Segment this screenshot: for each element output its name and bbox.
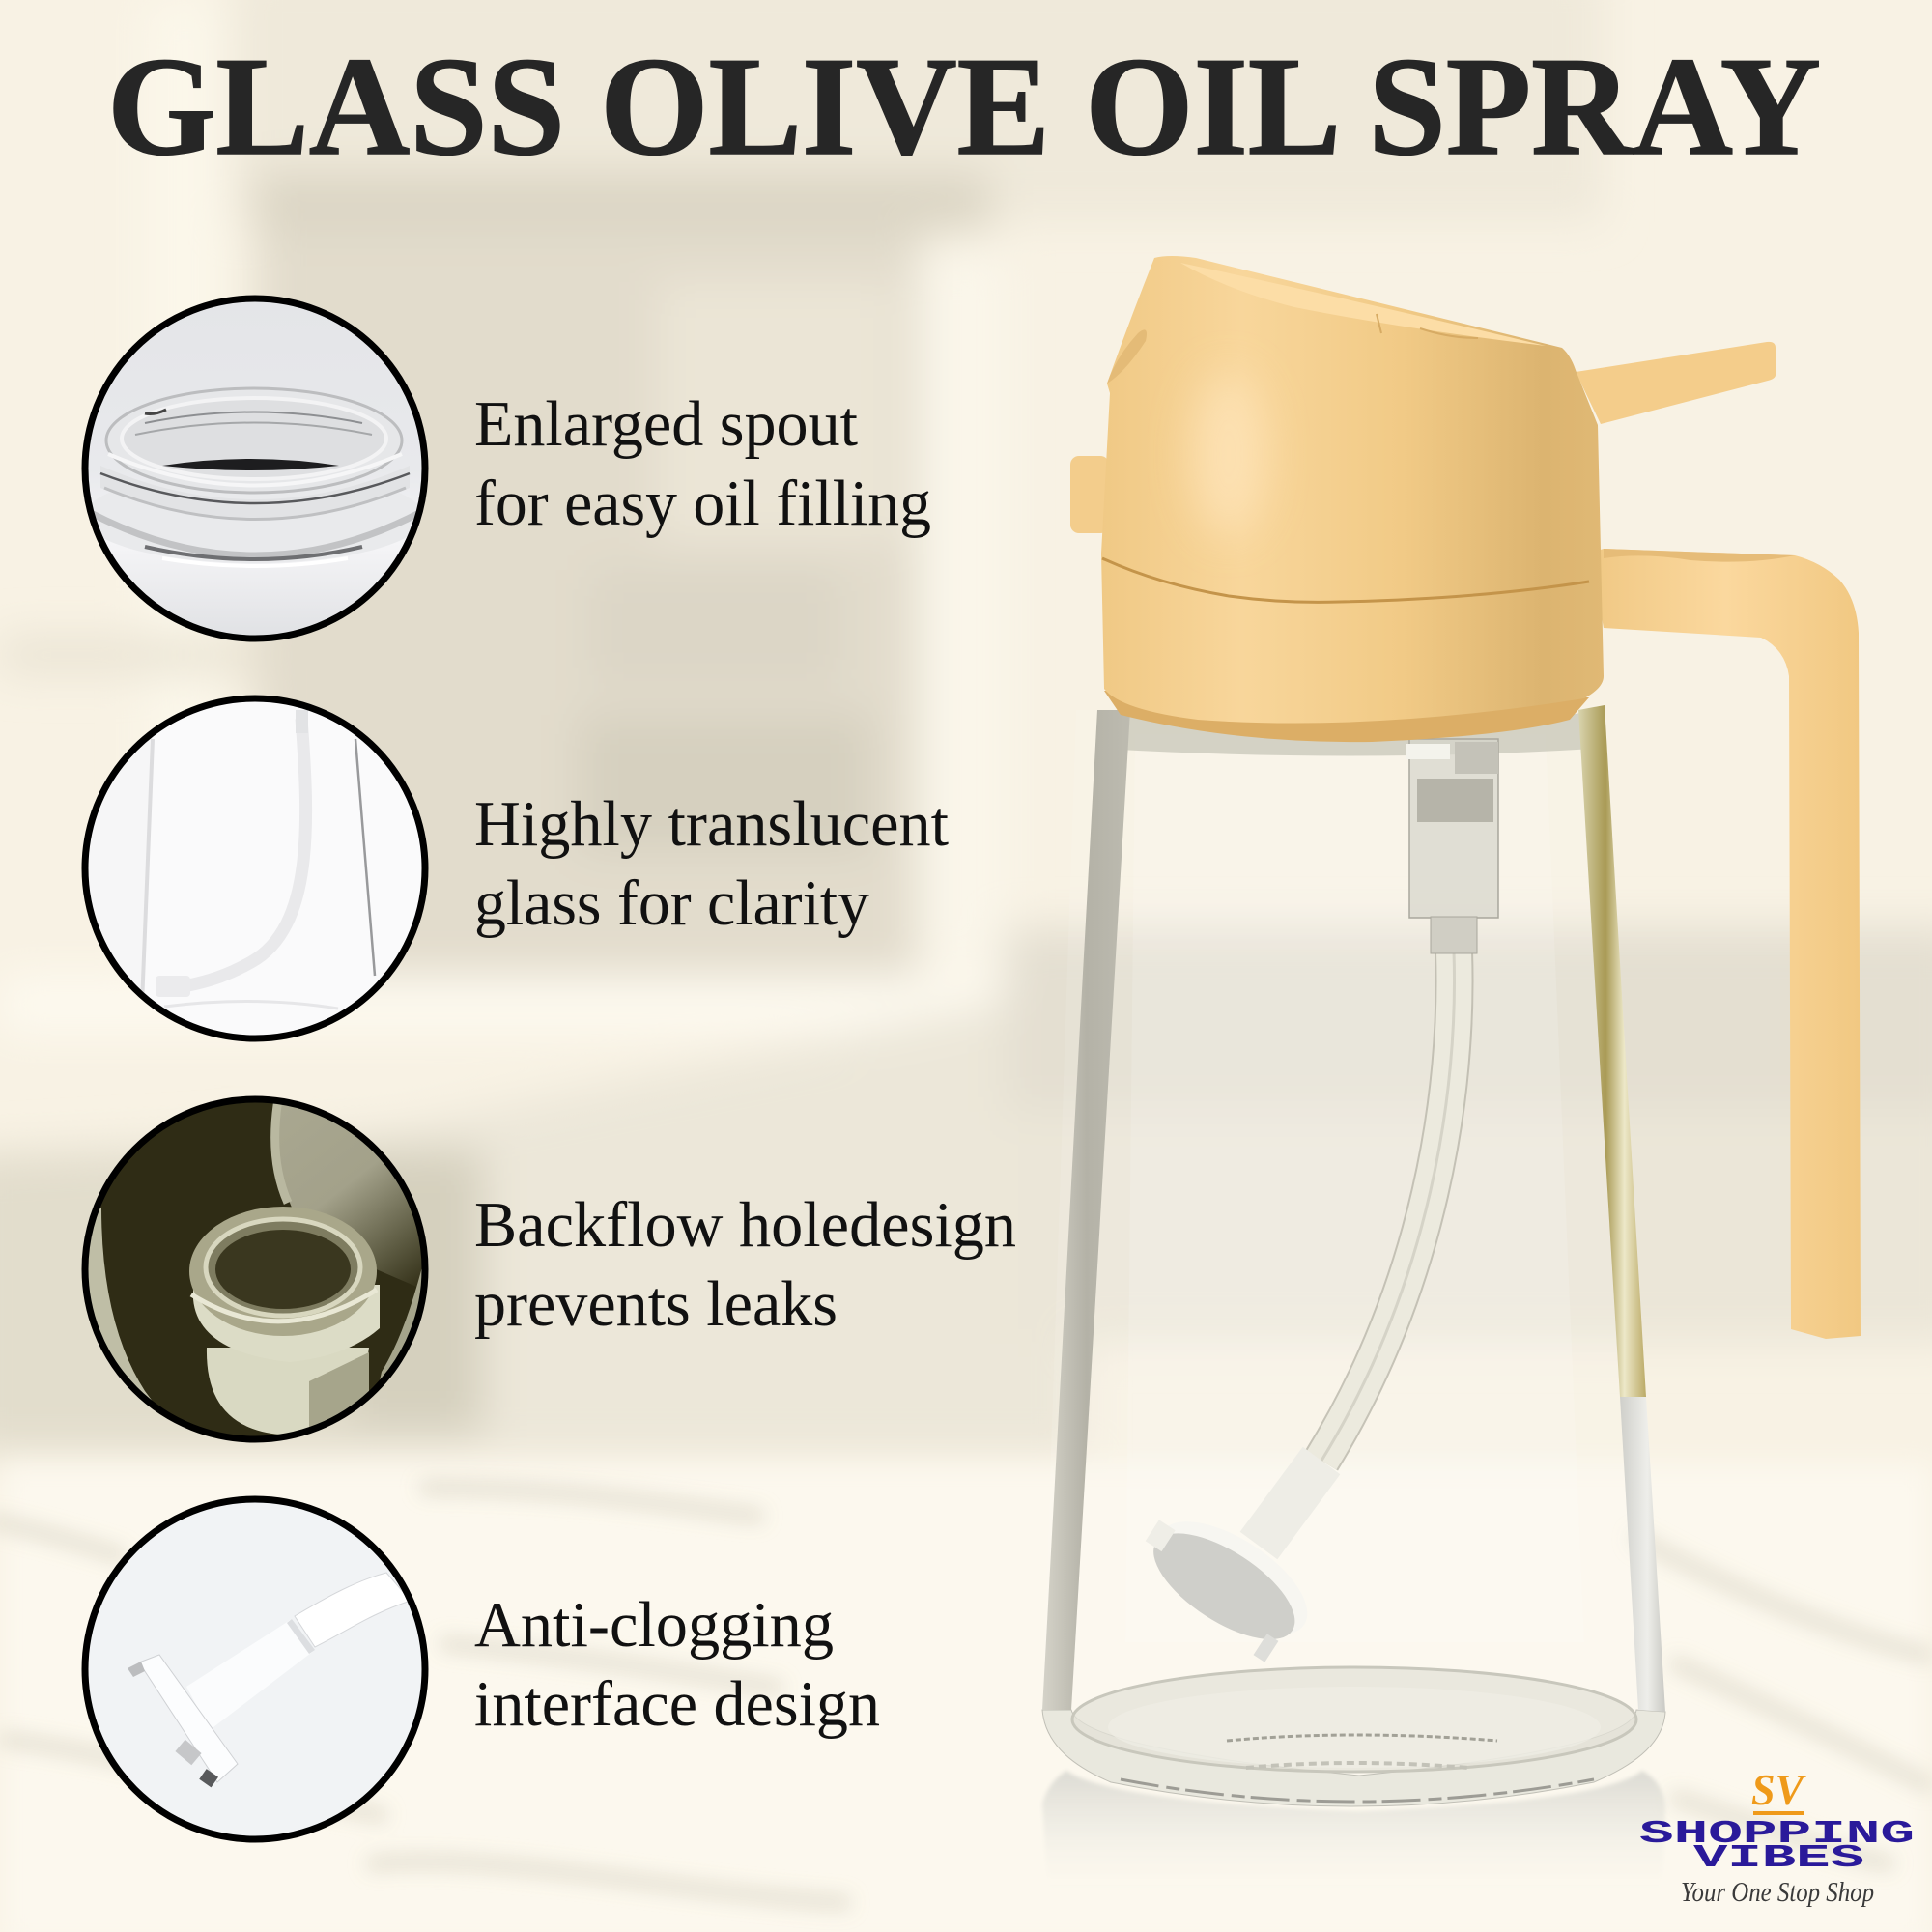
text: translucent glass: Highly translucent	[474, 788, 949, 860]
pump head	[1406, 739, 1498, 953]
feature 4: anti-clogging	[85, 1499, 880, 1839]
cap lever	[1576, 342, 1776, 424]
logo underline	[1753, 1811, 1804, 1815]
feature 2: translucent glass	[82, 698, 949, 1038]
glass body	[1042, 705, 1665, 1806]
side tab	[1070, 456, 1109, 533]
feature 3: backflow hole	[85, 1092, 1016, 1449]
circle image: anti-clogging interface	[85, 1499, 425, 1839]
handle	[1590, 549, 1861, 1339]
bottle reflection	[1042, 1771, 1665, 1898]
text: translucent glass: glass for clarity	[474, 867, 869, 939]
spray cap	[1101, 256, 1604, 742]
text: enlarged spout: for easy oil filling	[474, 468, 931, 539]
logo name: VIBES	[1693, 1840, 1864, 1876]
handle top shading	[1604, 549, 1795, 562]
logo tagline: Your One Stop Shop	[1681, 1878, 1874, 1908]
circle image: glass rim	[84, 298, 425, 639]
title: GLASS OLIVE OIL SPRAY	[107, 28, 1821, 185]
feature 1: enlarged spout	[84, 298, 931, 639]
circle image: backflow hole	[85, 1092, 435, 1449]
circle image: clear glass tube	[82, 698, 425, 1038]
text: enlarged spout: Enlarged spout	[474, 388, 858, 460]
text: anti-clogging: Anti-clogging	[474, 1589, 834, 1661]
text: backflow hole: Backflow holedesign	[474, 1189, 1016, 1261]
logo monogram: SV	[1751, 1765, 1806, 1814]
logo name: SHOPPING	[1639, 1816, 1915, 1852]
logo: Shopping Vibes	[1639, 1765, 1915, 1908]
pump filter disc	[1125, 1494, 1325, 1669]
text: backflow hole: prevents leaks	[474, 1268, 838, 1340]
pump tube	[1259, 952, 1455, 1546]
text: anti-clogging: interface design	[474, 1668, 880, 1740]
product: glass spray bottle	[1042, 256, 1861, 1898]
